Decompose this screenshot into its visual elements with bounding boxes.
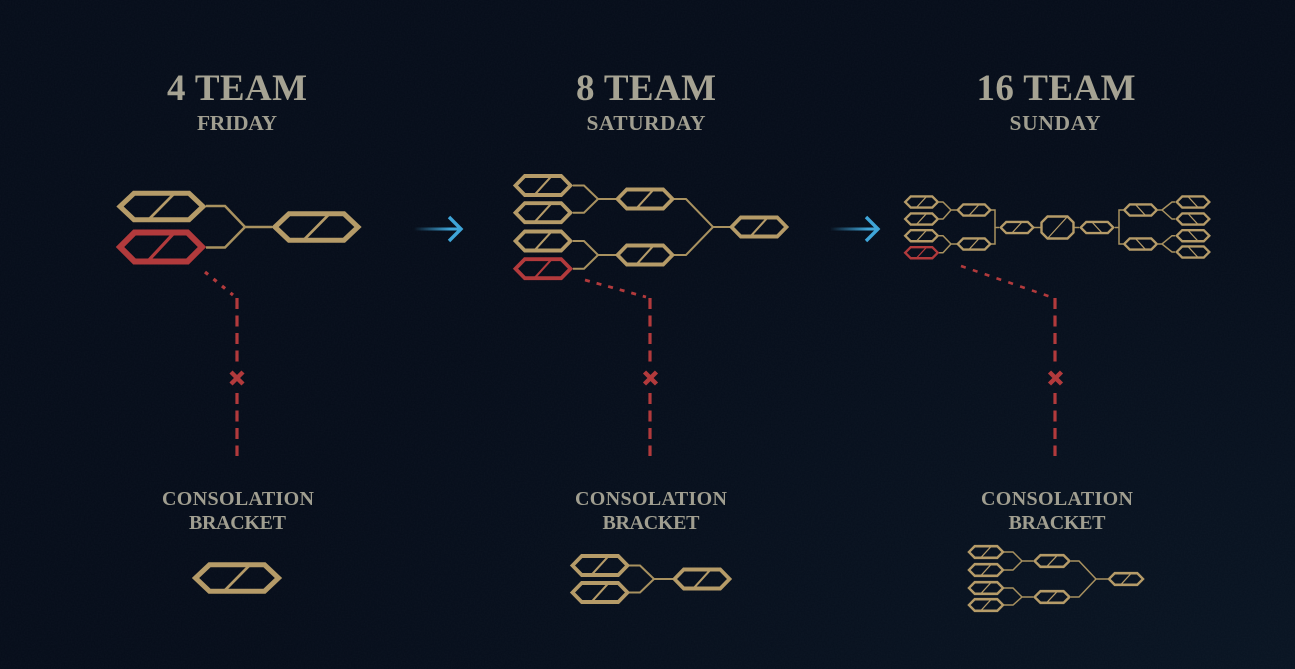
subheading: Sunday: SUNDAY (1010, 111, 1101, 135)
subheading: Friday: FRIDAY (197, 111, 277, 135)
match: final (275, 214, 358, 240)
connector lines (573, 186, 730, 269)
consolation bracket: 8 team (969, 546, 1143, 611)
heading: 4 team: 4 TEAM (167, 68, 307, 109)
icon: red cross (1050, 372, 1062, 384)
icon: red cross (231, 372, 243, 384)
bracket: 8 team (515, 176, 787, 278)
connector lines (206, 206, 272, 248)
dashed elimination path with cross (644, 298, 656, 456)
label: consolation bracket: CONSOLATION (981, 488, 1134, 510)
subheading: Saturday: SATURDAY (586, 111, 706, 135)
left quarterfinal matches (958, 204, 990, 250)
first round matches (515, 176, 571, 251)
dotted elimination path (961, 266, 1051, 297)
column: 16 team Sunday (905, 68, 1209, 611)
label: consolation bracket (162, 488, 315, 534)
match: grand final (1042, 216, 1074, 238)
bracket: 16 team (905, 196, 1209, 258)
match: eliminated team (515, 259, 571, 278)
connector lines (939, 202, 1175, 253)
consolation bracket: single match (196, 565, 278, 591)
dashed elimination path with cross (231, 298, 243, 456)
label: consolation bracket (981, 488, 1134, 534)
column: 4 team Friday (120, 68, 358, 591)
match: semifinal 1 (120, 193, 203, 220)
label: consolation bracket: BRACKET (189, 512, 287, 534)
match: eliminated team (905, 247, 938, 258)
right first round matches (1177, 196, 1209, 258)
match: eliminated team (120, 232, 202, 262)
label: consolation bracket: BRACKET (1008, 512, 1106, 534)
semifinal matches (617, 189, 673, 265)
dashed elimination path with cross (1050, 298, 1062, 456)
left first round matches (905, 196, 938, 241)
dotted elimination path (585, 280, 646, 297)
left semifinal match (1001, 222, 1033, 233)
label: consolation bracket: BRACKET (602, 512, 700, 534)
consolation bracket: 4 team (572, 556, 730, 602)
icon: red cross (644, 372, 656, 384)
label: consolation bracket (575, 488, 728, 534)
heading: 8 team: 8 TEAM (576, 68, 716, 109)
right quarterfinal matches (1124, 204, 1157, 250)
label: consolation bracket: CONSOLATION (162, 488, 315, 510)
heading: 16 team: 16 TEAM (976, 68, 1136, 109)
bracket: 4 team (120, 193, 358, 262)
dotted elimination path (205, 272, 233, 295)
match: final (731, 217, 787, 237)
arrow: 4 team to 8 team (414, 217, 461, 241)
column: 8 team Saturday (515, 68, 787, 602)
arrow: 8 team to 16 team (830, 217, 878, 241)
label: consolation bracket: CONSOLATION (575, 488, 728, 510)
right semifinal match (1081, 222, 1113, 233)
